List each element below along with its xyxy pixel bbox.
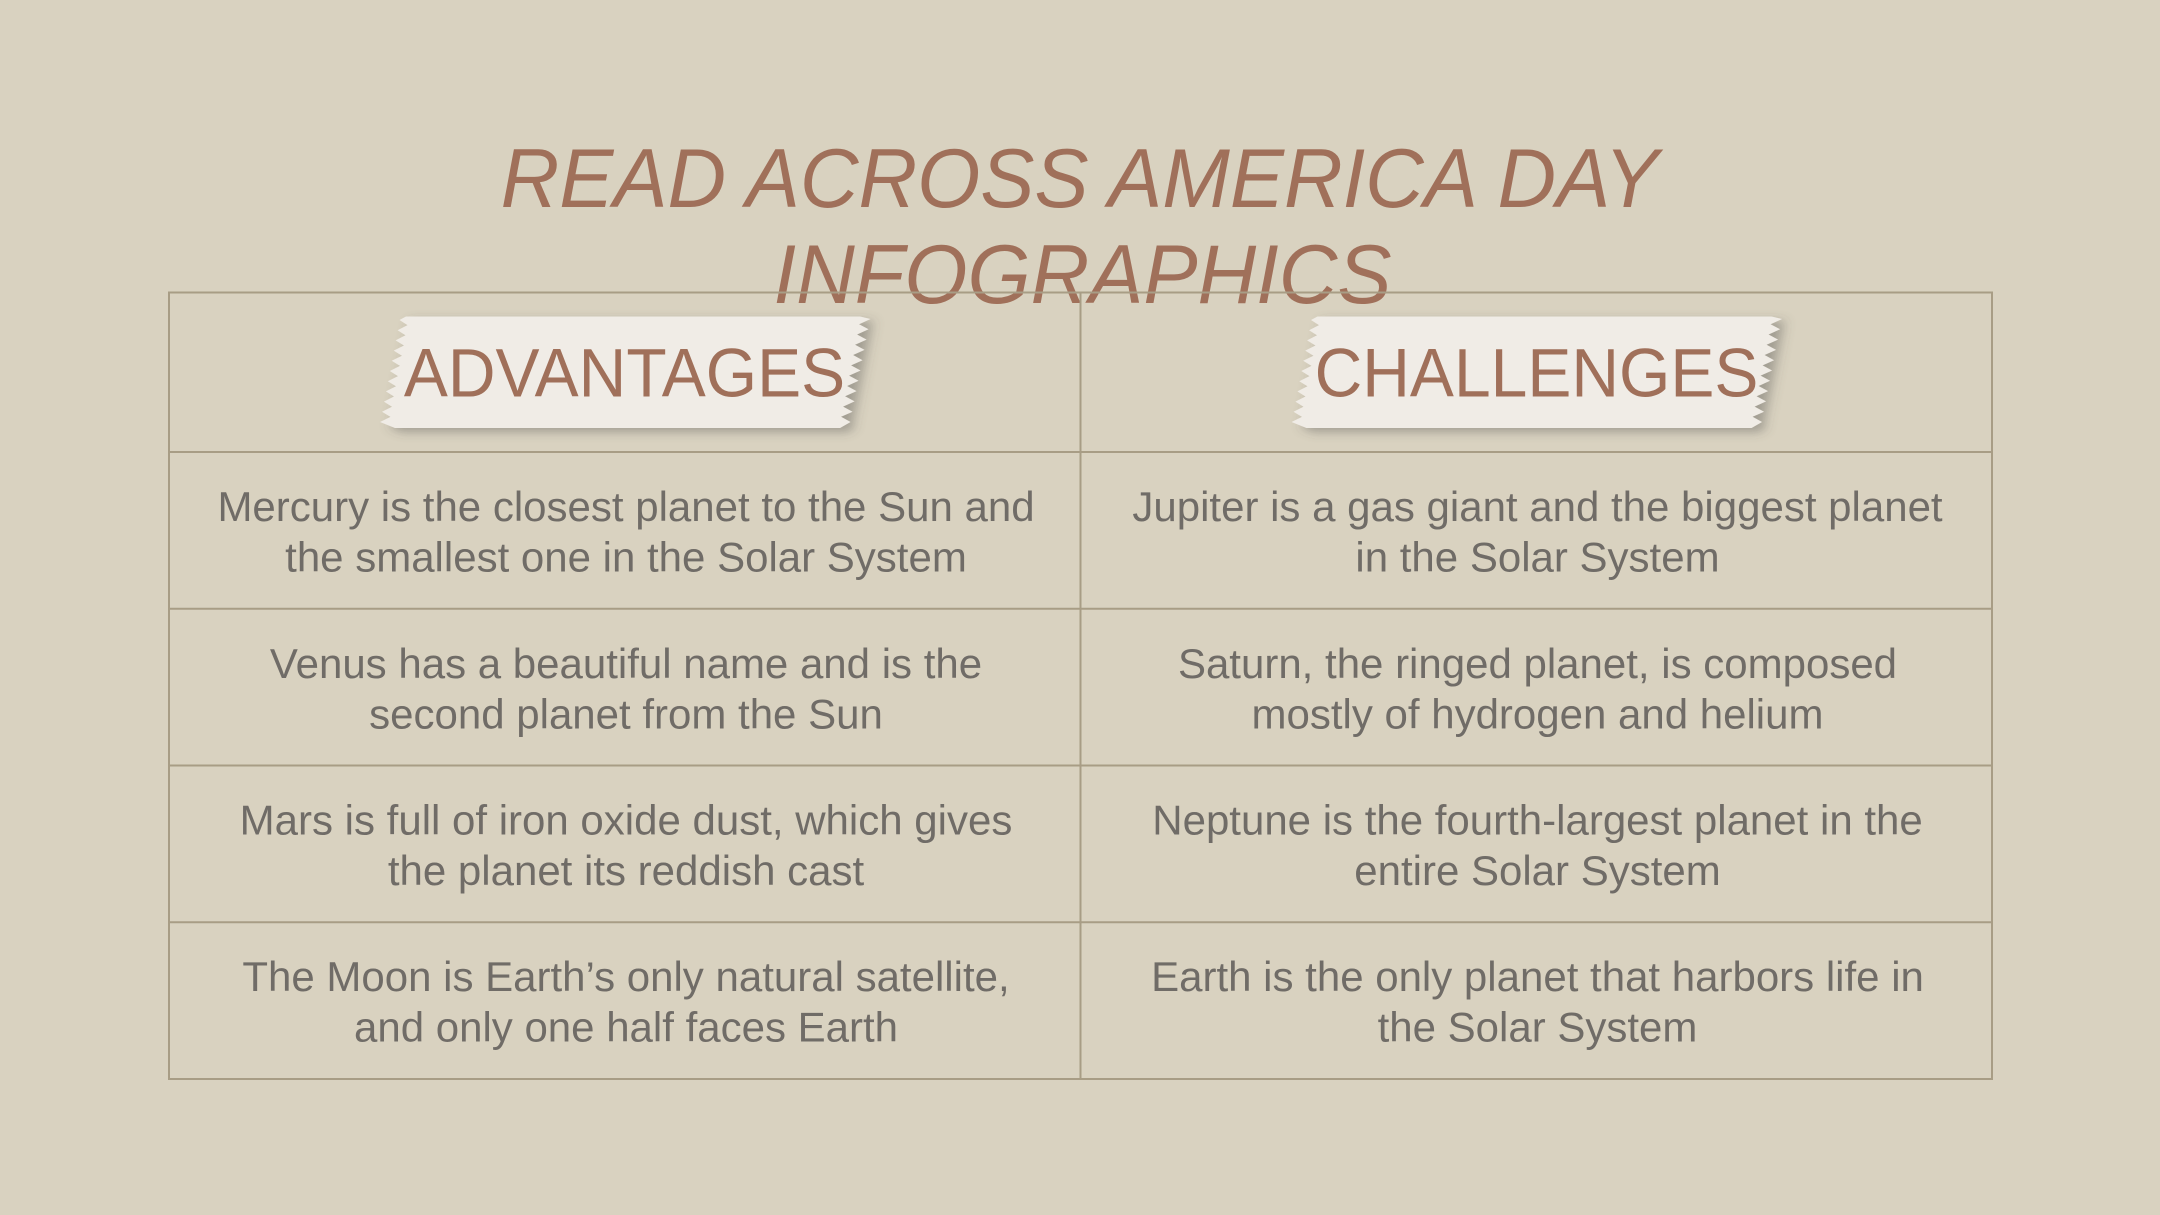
challenge: neptune [1152,796,1923,894]
challenge: jupiter [1132,483,1943,580]
table grid [169,292,1992,1079]
challenge: jupiter: Jupiter is a gas giant and the biggest planet [1132,483,1943,530]
advantage: mars: the planet its reddish cast [388,847,864,894]
title [501,132,1663,321]
challenge: neptune: Neptune is the fourth-largest planet in the [1152,796,1923,844]
advantage: mercury: Mercury is the closest planet to the Sun and [217,483,1035,530]
advantage: venus [270,640,982,738]
title: READ ACROSS AMERICA DAY [501,132,1663,225]
heading: challenges: CHALLENGES [1315,335,1758,412]
advantage: moon: The Moon is Earth’s only natural satellite, [242,953,1010,1000]
challenge: neptune: entire Solar System [1354,847,1721,894]
icon: washi tape label [1292,316,1782,428]
challenge: saturn [1178,640,1897,738]
advantage: venus: second planet from the Sun [369,690,883,738]
challenge: jupiter: in the Solar System [1355,534,1720,580]
challenge: earth: the Solar System [1378,1004,1697,1050]
advantage: moon: and only one half faces Earth [354,1004,898,1050]
challenge: earth [1151,953,1924,1050]
challenge: saturn: mostly of hydrogen and helium [1252,690,1823,738]
advantage: mars: Mars is full of iron oxide dust, which gives [240,796,1012,844]
column header: challenges [1292,316,1782,428]
advantage: mercury: the smallest one in the Solar System [285,534,967,580]
challenge: earth: Earth is the only planet that harbors life in [1151,953,1924,1000]
icon: washi tape label [380,316,870,428]
advantage: venus: Venus has a beautiful name and is the [270,640,982,687]
advantage: mercury [217,483,1035,580]
challenge: saturn: Saturn, the ringed planet, is composed [1178,640,1897,687]
column header: advantages [380,316,870,428]
advantage: moon [242,953,1010,1050]
title: INFOGRAPHICS [774,228,1391,321]
heading: advantages: ADVANTAGES [404,335,845,412]
advantage: mars [240,796,1012,894]
